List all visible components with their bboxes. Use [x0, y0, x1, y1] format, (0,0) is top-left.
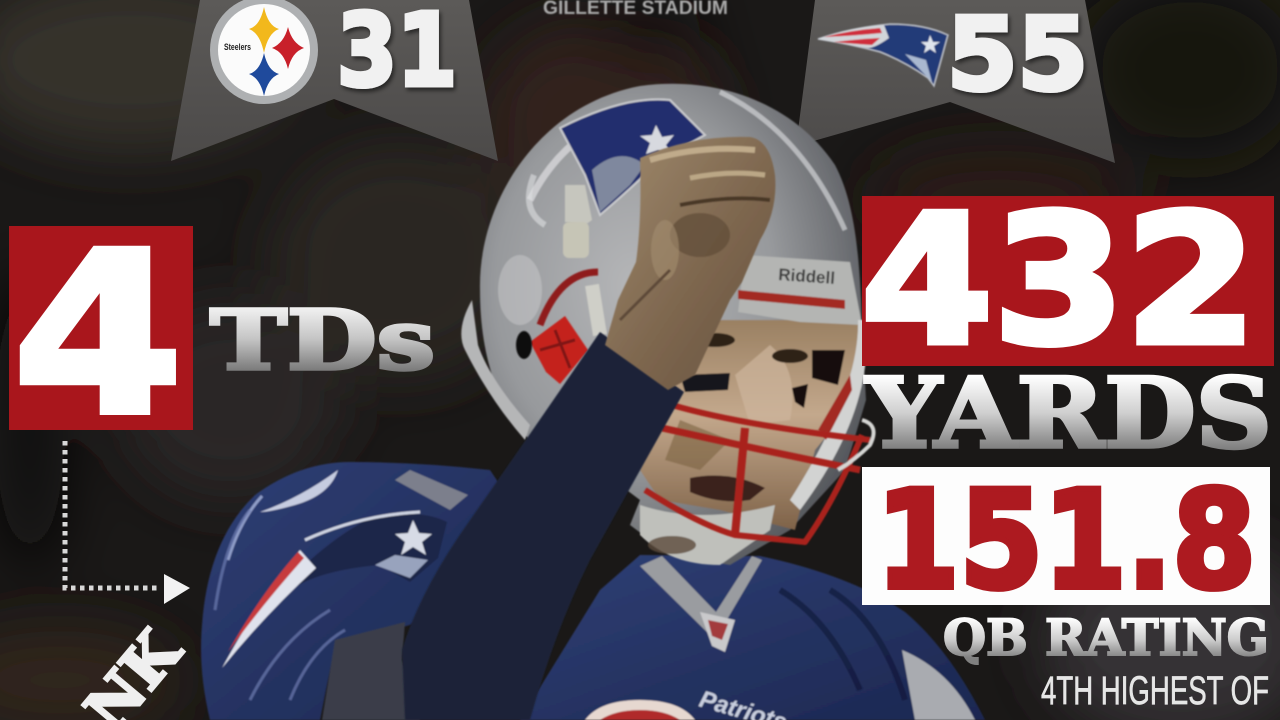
chin strap — [640, 505, 775, 565]
icon: Patriots logo — [818, 24, 948, 86]
raised arm sleeve — [402, 332, 684, 720]
face mask — [645, 405, 874, 542]
helmet side bolt — [516, 222, 589, 359]
ribbon: Patriots score — [796, 0, 1115, 163]
icon: Steelers logo: Steelers — [224, 42, 251, 52]
QB rating label: QB RATING — [943, 608, 1269, 667]
arrow: dotted connector — [65, 441, 190, 604]
icon: Steelers logo — [210, 0, 318, 104]
helmet: Riddell — [778, 265, 836, 288]
helmet — [461, 84, 867, 565]
player photo — [201, 84, 985, 720]
YARDS label: YARDS — [865, 357, 1272, 470]
TDs label: TDs — [210, 293, 435, 389]
raised fist — [605, 137, 775, 390]
red stat box: 432 — [861, 177, 1257, 384]
face — [640, 320, 860, 530]
left shoulder — [201, 462, 510, 720]
side face mask — [530, 272, 600, 384]
red stat box: 4 — [12, 204, 184, 465]
ribbon: Steelers score — [171, 0, 498, 161]
helmet logo — [560, 99, 705, 215]
stat: touchdowns — [9, 204, 435, 465]
jersey body — [520, 555, 985, 720]
visor band — [738, 255, 862, 325]
stat: QB rating — [862, 462, 1270, 713]
icon: shoulder Patriots logo — [222, 512, 447, 668]
stat: passing yards — [861, 177, 1274, 470]
